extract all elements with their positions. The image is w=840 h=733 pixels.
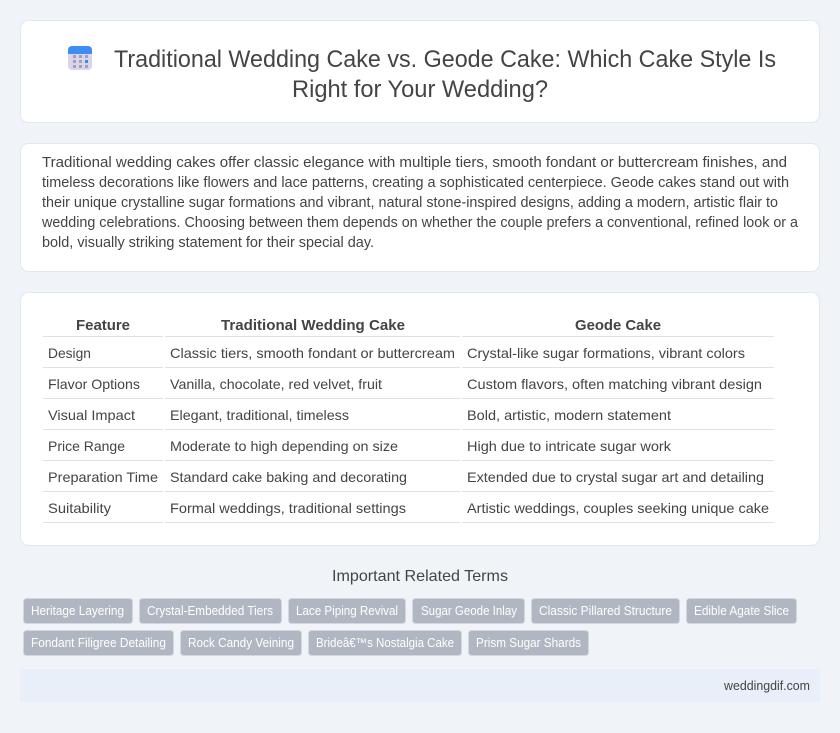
text block: summary paragraph: timeless decorations like flowers and lace patterns, creating a sophisticated centerpiece. Geode cakes stand out with <box>42 175 789 191</box>
tag: bride's nostalgia cake <box>308 630 462 656</box>
table row: preparation time: Standard cake baking and decorating <box>170 469 407 485</box>
table row: preparation time: Preparation Time <box>48 469 158 485</box>
tag: bride's nostalgia cake: Brideâ€™s Nostalgia Cake <box>316 636 454 650</box>
tag: sugar geode inlay: Sugar Geode Inlay <box>421 604 518 618</box>
text block: summary paragraph: wedding celebrations. Choosing between them depends on whether the couple prefers a conventional, refined look or a <box>41 215 798 231</box>
tag: fondant filigree detailing: Fondant Filigree Detailing <box>31 636 166 650</box>
title: Right for Your Wedding? <box>292 76 548 103</box>
text block: summary paragraph: Traditional wedding cakes offer classic elegance with multiple tiers, smooth fondant or buttercream finishes, and <box>42 155 787 171</box>
title: Traditional Wedding Cake vs. Geode Cake: Which Cake Style Is <box>114 46 776 73</box>
table row: price range: Price Range <box>48 438 125 454</box>
text block: summary paragraph: bold, visually striking statement for their special day. <box>42 235 374 251</box>
table row: flavor options: Flavor Options <box>48 376 140 392</box>
table row: price range: Moderate to high depending on size <box>170 438 398 454</box>
panel: comparison table <box>20 292 820 546</box>
table row: preparation time: Extended due to crystal sugar art and detailing <box>467 469 764 485</box>
table row: visual impact: Visual Impact <box>48 407 135 423</box>
tag: classic pillared structure: Classic Pillared Structure <box>539 604 672 618</box>
table row: design: Crystal-like sugar formations, vibrant colors <box>467 345 745 361</box>
tag: classic pillared structure <box>532 598 680 624</box>
tag: edible agate slice <box>686 598 796 624</box>
table row: suitability: Formal weddings, traditional settings <box>170 500 406 516</box>
text block: summary paragraph: their unique crystalline sugar formations and vibrant, natural stone-inspired designs, adding a modern, artistic flair to <box>42 195 778 211</box>
table row: visual impact: Bold, artistic, modern statement <box>467 407 671 423</box>
panel: title header <box>20 20 820 122</box>
table row: suitability <box>48 500 769 516</box>
table header row <box>76 317 661 334</box>
table header row: Geode Cake <box>575 317 661 334</box>
icon: calendar <box>68 46 92 70</box>
tag: rock candy veining <box>180 630 302 656</box>
table row: flavor options <box>48 376 762 392</box>
footer bar <box>20 669 820 702</box>
table row: suitability: Suitability <box>48 500 111 516</box>
footer source text: weddingdif.com <box>723 679 810 693</box>
table row: price range: High due to intricate sugar work <box>467 438 672 454</box>
table row: design <box>48 345 745 361</box>
tag: heritage layering: Heritage Layering <box>31 604 124 618</box>
table row: design: Design <box>48 345 91 361</box>
tag: lace piping revival <box>288 598 406 624</box>
text block: summary paragraph <box>41 155 798 251</box>
tag: rock candy veining: Rock Candy Veining <box>188 636 294 650</box>
table row: flavor options: Custom flavors, often matching vibrant design <box>467 376 762 392</box>
tag: edible agate slice: Edible Agate Slice <box>694 604 789 618</box>
tag: crystal-embedded tiers: Crystal-Embedded Tiers <box>147 604 273 618</box>
tag: lace piping revival: Lace Piping Revival <box>296 604 398 618</box>
tag: crystal-embedded tiers <box>140 598 282 624</box>
table row: price range <box>48 438 672 454</box>
tag: heritage layering <box>24 598 132 624</box>
table header row: Traditional Wedding Cake <box>221 317 405 334</box>
table header row: Feature <box>76 317 130 334</box>
panel: introduction <box>20 144 820 272</box>
heading: important related terms: Important Related Terms <box>332 568 508 585</box>
tag: sugar geode inlay <box>412 598 524 624</box>
tag: fondant filigree detailing <box>24 630 174 656</box>
title <box>114 46 776 103</box>
table row: visual impact: Elegant, traditional, timeless <box>170 407 349 423</box>
tag list: related terms <box>24 598 796 656</box>
table row: design: Classic tiers, smooth fondant or buttercream <box>170 345 455 361</box>
table row: preparation time <box>48 469 764 485</box>
table row: suitability: Artistic weddings, couples seeking unique cake <box>467 500 769 516</box>
tag: prism sugar shards <box>468 630 588 656</box>
tag: prism sugar shards: Prism Sugar Shards <box>476 636 581 650</box>
table row: visual impact <box>48 407 671 423</box>
table row: flavor options: Vanilla, chocolate, red velvet, fruit <box>170 376 382 392</box>
